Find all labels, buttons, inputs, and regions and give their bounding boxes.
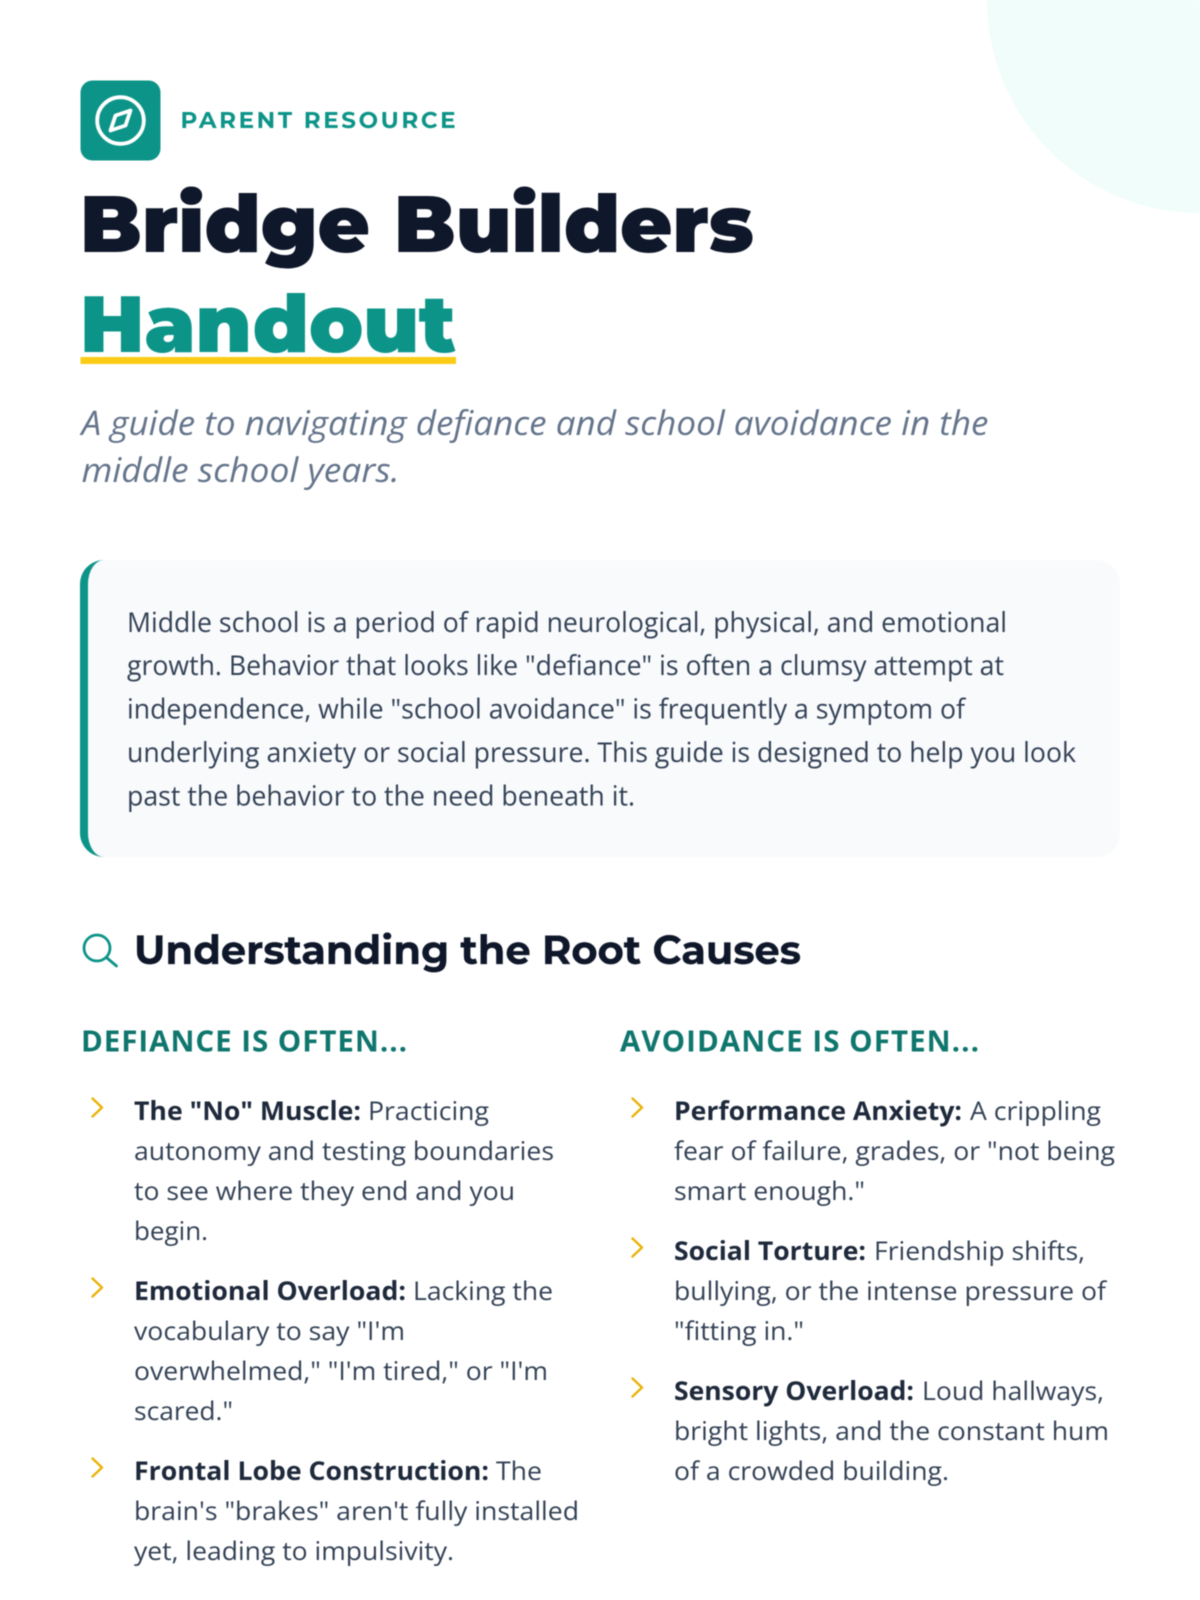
list item: no muscle: to see where they end and you	[134, 1172, 515, 1208]
list item: emotional overload: vocabulary to say "I'm	[134, 1312, 405, 1348]
intro text: underlying anxiety or social pressure. This guide is designed to help you look	[127, 733, 1076, 770]
icon: magnifying glass	[84, 935, 116, 966]
list item: no muscle: autonomy and testing boundaries	[134, 1132, 554, 1168]
list item: performance anxiety: fear of failure, grades, or "not being	[674, 1132, 1115, 1168]
list item: frontal lobe: Frontal Lobe Construction:	[134, 1452, 489, 1488]
list item: no muscle: Practicing	[368, 1092, 489, 1128]
intro text: growth. Behavior that looks like "defiance" is often a clumsy attempt at	[127, 646, 1004, 683]
column heading: DEFIANCE IS OFTEN...	[81, 1020, 407, 1060]
list item: sensory overload: Sensory Overload:	[674, 1372, 914, 1408]
subtitle: A guide to navigating defiance and school avoidance in the	[79, 399, 989, 445]
list item: no muscle: The "No" Muscle:	[134, 1092, 361, 1128]
list item: performance anxiety: smart enough."	[674, 1172, 865, 1208]
list item: social torture: "fitting in."	[674, 1312, 804, 1348]
list item: emotional overload: scared."	[134, 1392, 233, 1428]
list item: frontal lobe	[92, 1452, 579, 1568]
subtitle	[79, 399, 989, 492]
list item: emotional overload: overwhelmed," "I'm tired," or "I'm	[134, 1352, 548, 1388]
list item: sensory overload: Loud hallways,	[922, 1372, 1104, 1408]
list item: emotional overload	[92, 1272, 553, 1428]
section heading	[84, 926, 801, 975]
intro text	[127, 603, 1076, 814]
panel: avoidance column	[620, 1020, 1115, 1488]
list item: social torture: Friendship shifts,	[874, 1232, 1085, 1268]
heading text: Understanding the Root Causes	[134, 926, 801, 975]
list item: frontal lobe: yet, leading to impulsivity.	[134, 1532, 454, 1568]
list item: frontal lobe: The	[496, 1452, 542, 1488]
header	[79, 80, 989, 492]
decorative corner quarter circle	[987, 0, 1200, 213]
intro text: past the behavior to the need beneath it.	[127, 776, 635, 814]
intro text: independence, while "school avoidance" is frequently a symptom of	[127, 690, 967, 726]
eyebrow label: PARENT RESOURCE	[180, 106, 456, 134]
list item: no muscle: begin.	[134, 1212, 208, 1248]
icon: compass badge	[80, 80, 160, 160]
title line 2: Handout	[80, 276, 456, 373]
title line 1: Bridge Builders	[80, 176, 754, 273]
list item: sensory overload	[632, 1372, 1109, 1488]
list item: frontal lobe: brain's "brakes" aren't fully installed	[134, 1492, 579, 1528]
list item: emotional overload: Lacking the	[413, 1272, 553, 1308]
list item: performance anxiety: Performance Anxiety:	[674, 1092, 962, 1128]
list item: no muscle	[92, 1092, 554, 1248]
column heading: AVOIDANCE IS OFTEN...	[620, 1020, 979, 1060]
list item: performance anxiety	[632, 1092, 1115, 1208]
list item: emotional overload: Emotional Overload:	[134, 1272, 406, 1308]
list item: social torture: bullying, or the intense pressure of	[674, 1272, 1107, 1308]
list item: sensory overload: of a crowded building.	[674, 1452, 949, 1488]
intro text: Middle school is a period of rapid neurological, physical, and emotional	[127, 603, 1007, 640]
panel: defiance column	[81, 1020, 579, 1568]
list item: social torture	[632, 1232, 1107, 1348]
list item: sensory overload: bright lights, and the constant hum	[674, 1412, 1109, 1448]
subtitle: middle school years.	[82, 446, 400, 492]
panel: intro callout	[80, 560, 1120, 857]
list item: social torture: Social Torture:	[674, 1232, 866, 1268]
list item: performance anxiety: A crippling	[970, 1092, 1101, 1128]
